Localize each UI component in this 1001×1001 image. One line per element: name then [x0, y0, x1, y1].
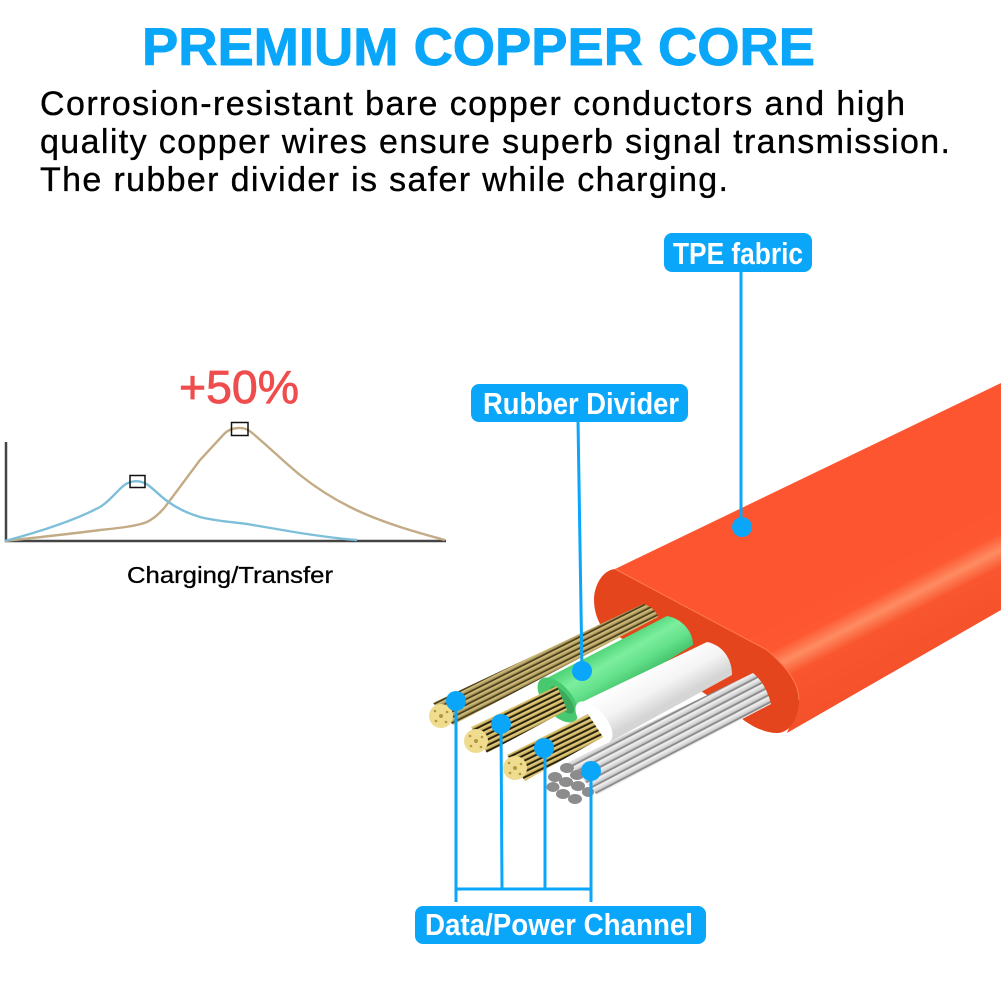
green rubber divider — [530, 616, 693, 730]
white tube — [569, 642, 732, 749]
callout label — [664, 233, 812, 272]
callout leader line — [740, 270, 742, 526]
callout leader line — [578, 420, 582, 671]
callout: Data/Power Channel: Data/Power Channel — [425, 907, 693, 942]
callout: TPE fabric: TPE fabric — [673, 236, 803, 271]
callout: Rubber Divider: Rubber Divider — [483, 386, 679, 421]
copper wire 2 — [464, 686, 567, 753]
copper wire 3 — [503, 714, 603, 781]
description text: quality copper wires ensure superb signal transmission. — [40, 123, 950, 161]
peak marker: tan curve — [232, 422, 248, 436]
callout dot — [572, 661, 592, 681]
silver strand ends — [546, 763, 594, 804]
cable end face rim — [615, 569, 799, 700]
tan curve — [5, 428, 445, 541]
title: PREMIUM COPPER CORE — [142, 18, 815, 77]
description text: Corrosion-resistant bare copper conductors and high — [40, 85, 905, 123]
callout: TPE fabric — [664, 233, 812, 537]
wire dots — [446, 691, 601, 781]
callout: Rubber Divider — [471, 384, 688, 681]
callout label — [471, 384, 688, 422]
callout: Data/Power Channel — [415, 691, 706, 944]
bracket lines to wires — [456, 701, 591, 902]
description text: The rubber divider is safer while charging. — [40, 161, 728, 199]
copper wire 1 — [429, 604, 658, 728]
wire end strands — [429, 704, 453, 728]
cable jacket: TPE fabric — [615, 383, 1001, 733]
chart axis label: Charging/Transfer — [127, 562, 333, 588]
line chart: charging/transfer — [5, 361, 446, 588]
callout dot — [732, 517, 752, 537]
description text — [40, 85, 950, 199]
cable illustration — [429, 383, 1001, 804]
chart axes — [6, 442, 446, 541]
blue curve — [5, 481, 357, 541]
peak marker: blue curve — [130, 476, 145, 488]
cable end face — [594, 569, 799, 733]
silver strands — [568, 673, 771, 795]
callout label — [415, 906, 706, 944]
chart heading: +50%: +50% — [179, 361, 299, 413]
